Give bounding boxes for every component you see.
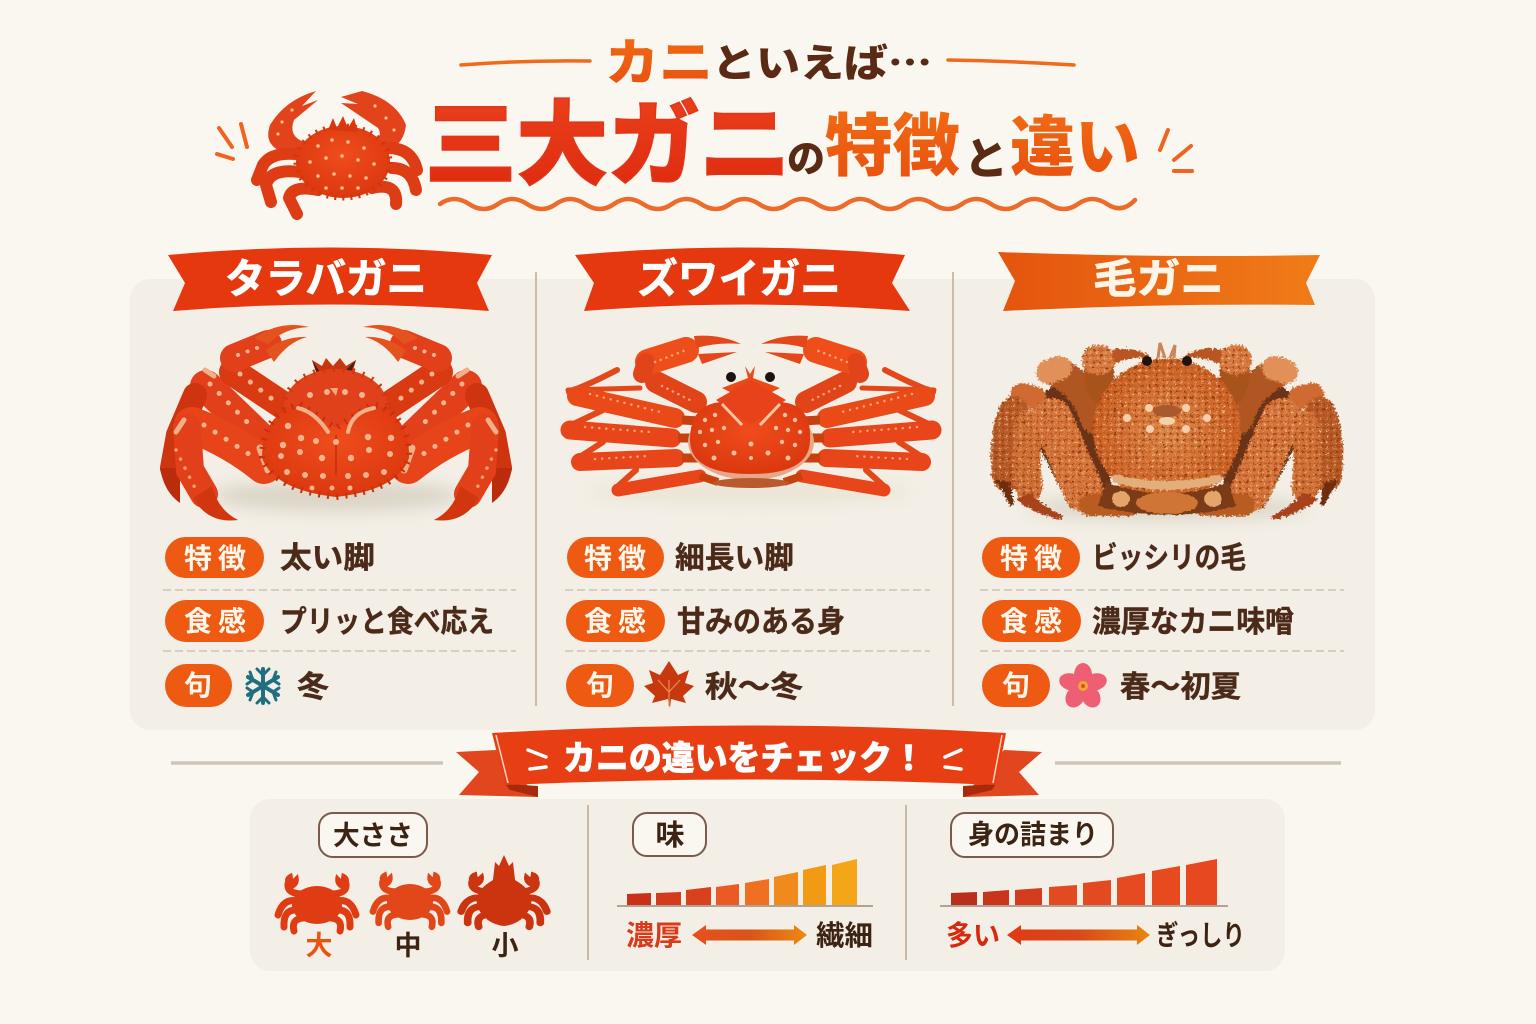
row: 特徴 <box>982 537 1246 578</box>
ribbon: タラバガニ: タラバガニ <box>225 256 427 302</box>
chip: 身の詰まり: 身の詰まり <box>968 820 1098 850</box>
ribbon: 毛ガニ <box>998 252 1320 311</box>
row: 食感 <box>982 600 1294 642</box>
label: 大: 大 <box>306 931 332 961</box>
title: 三大ガニの特徴と違い: の <box>787 139 825 181</box>
icon: medium crab <box>373 874 447 927</box>
row: 句: 句 <box>184 670 212 701</box>
panel: タラバガニ <box>160 248 516 707</box>
chip: 味: 味 <box>655 819 685 852</box>
title: 三大ガニの特徴と違い: 違い <box>1010 110 1140 184</box>
icon: right sparks <box>1160 130 1192 171</box>
chip: 大ささ: 大ささ <box>333 821 413 851</box>
row: 食感 <box>566 600 845 642</box>
divider: column 1 and 2 <box>535 272 537 706</box>
row: 食感: 濃厚なカニ味噌 <box>1092 606 1294 639</box>
title: 三大ガニの特徴と違い: 特徴 <box>825 109 960 185</box>
ribbon: タラバガニ <box>168 248 492 311</box>
chip: 大ささ <box>319 813 427 857</box>
section: 大ささ size comparison <box>278 813 547 961</box>
arrow: meat <box>1007 925 1150 945</box>
illustration: タラバガニ <box>160 325 512 521</box>
row: 句 <box>165 664 329 707</box>
divider line: right <box>1055 761 1341 765</box>
row: 食感 <box>165 600 494 642</box>
row: 特徴: 特徴 <box>584 543 646 574</box>
bar chart: taste <box>617 859 873 906</box>
row: 句: 句 <box>1002 670 1030 701</box>
heading: カニといえば… <box>461 33 1074 91</box>
arrow: taste <box>692 925 807 945</box>
row: 句: 句 <box>586 670 614 701</box>
section: 身の詰まり meat fullness <box>940 813 1245 951</box>
row: 特徴: 太い脚 <box>280 542 375 575</box>
heading: カニといえば…: といえば… <box>712 33 932 89</box>
row: 食感: 食感 <box>184 606 246 637</box>
ribbon: カニの違いをチェック！ <box>456 726 1042 797</box>
row: 特徴: 細長い脚 <box>675 542 794 575</box>
divider line: left <box>171 761 443 765</box>
row: 食感: 食感 <box>584 606 646 637</box>
icon: cherry blossom <box>1057 663 1109 711</box>
label: 小: 小 <box>492 931 518 961</box>
panel: ズワイガニ <box>565 248 937 708</box>
icon: small crab <box>461 855 547 927</box>
title: 三大ガニの特徴と違い: 三大ガニ <box>425 95 791 197</box>
illustration: ズワイガニ <box>565 336 937 504</box>
panel: 毛ガニ <box>980 252 1344 711</box>
panel: difference check background <box>250 799 1285 971</box>
title: 三大ガニの特徴と違い: と <box>964 135 1008 184</box>
row: 句: 春～初夏 <box>1120 671 1241 704</box>
bar chart: meat <box>940 859 1228 906</box>
row: 特徴 <box>165 537 375 578</box>
row: 句: 冬 <box>297 671 329 704</box>
heading: カニといえば…: カニ <box>605 35 713 91</box>
divider: bottom 2 <box>905 805 907 960</box>
row: 特徴: 特徴 <box>1000 543 1062 574</box>
title: 三大ガニの特徴と違い <box>425 95 1140 197</box>
row: 句: 秋～冬 <box>705 671 803 704</box>
icon: large crab <box>278 875 356 931</box>
ribbon: ズワイガニ: ズワイガニ <box>637 256 841 302</box>
row: 特徴: ビッシリの毛 <box>1092 542 1246 575</box>
row: 食感: プリッと食べ応え <box>280 606 494 639</box>
row: 食感: 甘みのある身 <box>677 606 845 639</box>
panel: comparison card background <box>130 279 1375 730</box>
divider: bottom 1 <box>587 805 589 960</box>
ribbon: 毛ガニ: 毛ガニ <box>1093 256 1224 302</box>
row: 特徴: 特徴 <box>184 543 246 574</box>
decor: ribbon sparkle strokes <box>528 750 961 769</box>
icon: snowflake <box>247 669 279 703</box>
icon: maple leaf <box>644 661 694 708</box>
label: 濃厚: 濃厚 <box>626 920 682 951</box>
label: ぎっしり: ぎっしり <box>1156 920 1245 951</box>
row: 食感: 食感 <box>1000 606 1062 637</box>
row: 特徴 <box>567 537 794 578</box>
divider: column 2 and 3 <box>952 272 954 706</box>
ribbon: ズワイガニ <box>575 248 910 311</box>
icon: title crab <box>257 91 417 214</box>
section: 味 taste scale <box>617 813 873 951</box>
row: 句 <box>566 661 803 708</box>
chip: 身の詰まり <box>951 813 1113 857</box>
chip: 味 <box>633 813 706 856</box>
ribbon: カニの違いをチェック！: カニの違いをチェック！ <box>563 740 925 778</box>
label: 繊細: 繊細 <box>816 920 873 951</box>
icon: left sparks <box>217 124 247 159</box>
wavy underline <box>440 199 1135 209</box>
label: 多い: 多い <box>946 920 1000 951</box>
row: 句 <box>982 663 1241 711</box>
illustration: 毛ガニ <box>999 343 1335 520</box>
label: 中: 中 <box>394 931 422 961</box>
